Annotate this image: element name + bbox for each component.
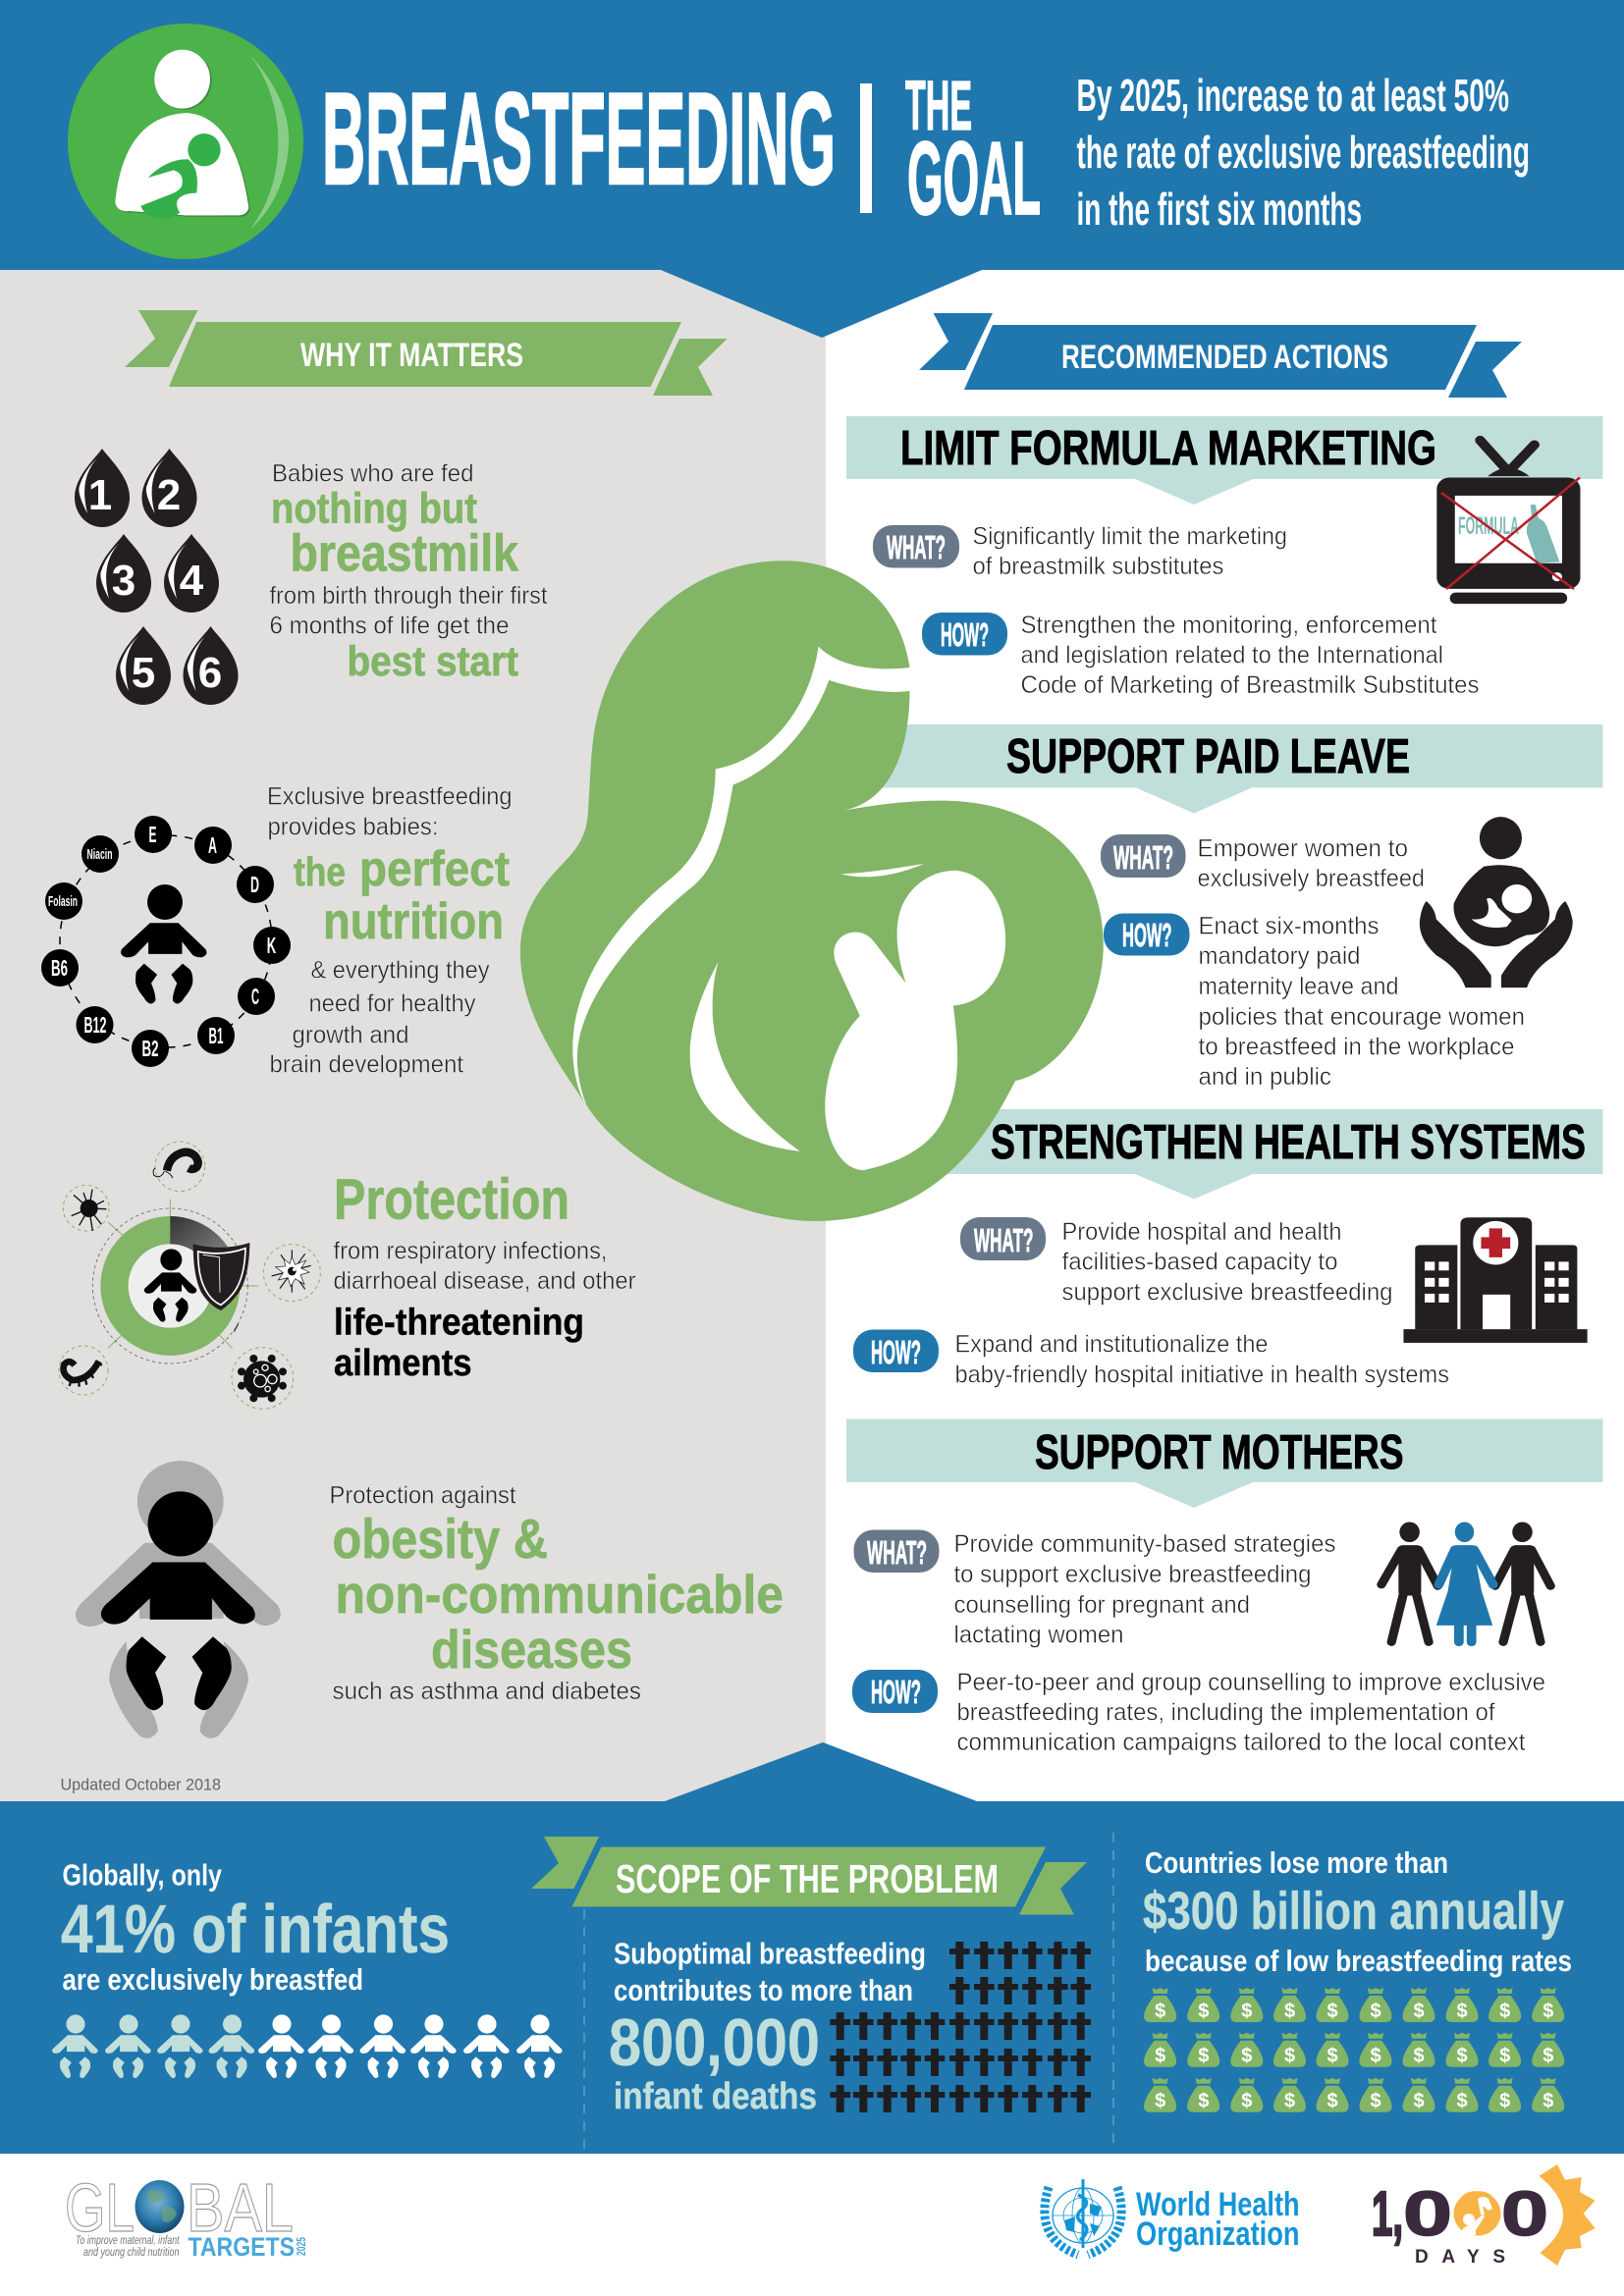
- stat: 800,000 infant deaths: contributes to more than: [614, 1973, 913, 2007]
- how text: mandatory paid: [1198, 942, 1361, 970]
- text block: protection: ailments: [334, 1343, 471, 1384]
- logo: 1,000 days: 0: [1403, 2178, 1452, 2249]
- how text: Code of Marketing of Breastmilk Substitutes: [1021, 671, 1479, 699]
- germ: caterpillar lower left: [64, 1362, 102, 1387]
- what text: Provide community-based strategies: [954, 1530, 1335, 1558]
- icon: baby with obesity silhouette: [76, 1461, 281, 1738]
- what text: Significantly limit the marketing: [972, 522, 1287, 550]
- icon: six milk drops: [75, 449, 238, 705]
- logo: world health organization: World Health: [1136, 2186, 1300, 2223]
- what pill: [960, 1217, 1046, 1260]
- text block: the perfect nutrition: [267, 783, 513, 1079]
- text block: nothing but breastmilk: Babies who are fed: [272, 460, 473, 488]
- icon: six milk drops: 5: [132, 649, 155, 697]
- heading: the goal: THE: [905, 68, 972, 145]
- panel: support paid leave: [846, 724, 1602, 1091]
- text block: protection: life-threatening: [334, 1302, 584, 1343]
- how text: [956, 1669, 1545, 1756]
- icon row: ten babies: [52, 2014, 563, 2078]
- logo: global targets 2025: and young child nutrition: [83, 2245, 180, 2259]
- text block: the perfect nutrition: perfect: [359, 841, 510, 896]
- logo: 1,000 days: 0: [1501, 2178, 1548, 2249]
- germ: star right: [272, 1250, 311, 1293]
- germ: worm top: [153, 1152, 198, 1178]
- mother and baby central illustration: [520, 561, 1104, 1221]
- how text: [1198, 913, 1525, 1091]
- panel: limit formula marketing: LIMIT FORMULA MARKETING: [900, 422, 1436, 475]
- icon: baby with vitamin ring: B12: [84, 1012, 106, 1038]
- what text: [954, 1530, 1335, 1649]
- stat: 41 percent of infants: 41% of infants: [61, 1891, 450, 1967]
- text block: the perfect nutrition: nutrition: [323, 893, 504, 950]
- logo: global targets 2025: TARGETS: [189, 2232, 295, 2262]
- what pill: [854, 1529, 939, 1573]
- text block: obesity and non-communicable diseases: such as asthma and diabetes: [332, 1678, 641, 1705]
- how pill: [852, 1670, 938, 1713]
- icon: three people holding hands: [1381, 1522, 1550, 1642]
- what text: lactating women: [954, 1622, 1123, 1649]
- goal statement: [1076, 70, 1530, 235]
- how pill: HOW?: [1122, 917, 1172, 953]
- what text: of breastmilk substitutes: [972, 553, 1223, 580]
- header band: [0, 0, 1624, 338]
- what pill: WHAT?: [1113, 839, 1173, 876]
- text block: nothing but breastmilk: [269, 460, 548, 685]
- icon: baby with vitamin ring: B1: [208, 1023, 224, 1048]
- text block: nothing but breastmilk: best start: [348, 638, 518, 685]
- icon: baby with vitamin ring: E: [149, 822, 157, 847]
- what text: Provide hospital and health: [1062, 1218, 1341, 1246]
- text block: nothing but breastmilk: from birth through their first: [269, 582, 548, 610]
- how pill: HOW?: [871, 1674, 921, 1710]
- ribbon: why it matters: WHY IT MATTERS: [300, 337, 523, 374]
- panel: support mothers: [846, 1419, 1602, 1756]
- ribbon: recommended actions: RECOMMENDED ACTIONS: [1061, 339, 1388, 376]
- logo: 1,000 days: [1372, 2164, 1596, 2268]
- left panel background: [0, 270, 826, 1801]
- how text: maternity leave and: [1198, 973, 1398, 1000]
- how text: policies that encourage women: [1198, 1003, 1525, 1031]
- icon: six milk drops: 1: [88, 471, 112, 519]
- text block: the perfect nutrition: Exclusive breastfeeding: [267, 783, 513, 811]
- how text: and in public: [1198, 1063, 1331, 1091]
- what text: [1062, 1218, 1392, 1306]
- icon: baby with vitamin ring: C: [251, 984, 259, 1009]
- text block: nothing but breastmilk: nothing but: [271, 485, 477, 532]
- text block: protection: diarrhoeal disease, and other: [334, 1267, 636, 1295]
- how pill: HOW?: [871, 1334, 921, 1370]
- ribbon: why it matters: [125, 310, 728, 396]
- what text: support exclusive breastfeeding: [1062, 1278, 1392, 1306]
- icon grid: money bags: $$$$$$$$$$: [1155, 2091, 1553, 2112]
- text: GOAL: [907, 121, 1041, 237]
- logo: global targets 2025: GL: [65, 2169, 135, 2246]
- icon: baby with vitamin ring: [41, 816, 291, 1067]
- icon: six milk drops: 3: [112, 557, 135, 605]
- panel: support paid leave: SUPPORT PAID LEAVE: [1006, 730, 1410, 783]
- title: [322, 67, 872, 213]
- text block: protection: [334, 1168, 636, 1384]
- how pill: HOW?: [941, 616, 989, 653]
- icon: television with crossed formula ad: FORMULA: [1458, 512, 1519, 540]
- logo: 1,000 days: DAYS: [1415, 2247, 1505, 2268]
- logo: 1,000 days: 0: [1453, 2178, 1500, 2249]
- icon: six milk drops: 2: [157, 471, 181, 519]
- text block: nothing but breastmilk: 6 months of life get the: [269, 613, 509, 640]
- text block: obesity and non-communicable diseases: Protection against: [330, 1482, 516, 1510]
- panel: limit formula marketing: [846, 416, 1602, 699]
- icon: baby with vitamin ring: Niacin: [86, 846, 112, 863]
- stat: 800,000 infant deaths: 800,000: [609, 2005, 820, 2080]
- how text: Peer-to-peer and group counselling to improve exclusive: [956, 1669, 1545, 1696]
- text block: the perfect nutrition: provides babies:: [267, 814, 438, 841]
- text block: obesity and non-communicable diseases: [330, 1482, 784, 1705]
- what pill: WHAT?: [974, 1222, 1033, 1258]
- how text: to breastfeed in the workplace: [1198, 1033, 1514, 1060]
- ribbon: recommended actions: [919, 313, 1522, 398]
- stat: 41 percent of infants: Globally, only: [63, 1857, 223, 1893]
- how text: breastfeeding rates, including the implementation of: [956, 1698, 1495, 1726]
- stat: 800,000 infant deaths: Suboptimal breastfeeding: [614, 1936, 926, 1971]
- panel: scope of the problem band: [0, 1742, 1624, 2154]
- how text: Expand and institutionalize the: [954, 1331, 1269, 1359]
- how text: [954, 1331, 1449, 1388]
- text block: obesity and non-communicable diseases: non-communicable: [336, 1564, 784, 1625]
- logo: 1,000 days: 1,: [1372, 2178, 1403, 2249]
- what pill: WHAT?: [887, 529, 946, 565]
- stat: 41 percent of infants: [61, 1857, 450, 1997]
- what pill: [1101, 834, 1186, 878]
- logo: global targets 2025: To improve maternal, infant: [76, 2233, 180, 2247]
- ribbon: scope of the problem: SCOPE OF THE PROBLEM: [616, 1856, 999, 1901]
- how pill: [1104, 913, 1190, 956]
- logo: global targets 2025: BAL: [187, 2169, 294, 2246]
- icon: television with crossed formula ad: [1436, 440, 1580, 604]
- what text: to support exclusive breastfeeding: [954, 1561, 1312, 1588]
- icon grid: crosses: [830, 1942, 1091, 2112]
- panel: support mothers: SUPPORT MOTHERS: [1035, 1426, 1404, 1479]
- panel: strengthen health systems: [846, 1109, 1602, 1388]
- how text: communication campaigns tailored to the local context: [956, 1729, 1526, 1756]
- icon: baby with vitamin ring: B6: [51, 955, 68, 981]
- icon: baby with vitamin ring: A: [208, 832, 217, 858]
- what text: exclusively breastfeed: [1198, 865, 1425, 892]
- ribbon: scope of the problem: [531, 1837, 1087, 1914]
- text block: the perfect nutrition: brain development: [269, 1051, 463, 1079]
- what text: [972, 522, 1287, 580]
- how pill: [922, 613, 1007, 656]
- stat: 800,000 infant deaths: infant deaths: [614, 2076, 817, 2117]
- text block: protection: Protection: [334, 1168, 569, 1231]
- icon: baby with vitamin ring: B2: [141, 1036, 159, 1061]
- stat: 41 percent of infants: are exclusively breastfed: [63, 1962, 363, 1997]
- icon grid: money bags: $$$$$$$$$$: [1155, 2001, 1553, 2022]
- how text: Enact six-months: [1198, 913, 1379, 940]
- text block: the perfect nutrition: the: [294, 849, 346, 894]
- what text: [1198, 834, 1425, 892]
- how text: Strengthen the monitoring, enforcement: [1021, 612, 1437, 639]
- germ: spiked cell left: [72, 1190, 106, 1231]
- what text: facilities-based capacity to: [1062, 1249, 1337, 1276]
- icon: protected baby with germs: [59, 1142, 320, 1409]
- goal statement: in the first six months: [1076, 184, 1362, 235]
- text block: nothing but breastmilk: breastmilk: [291, 524, 518, 583]
- what text: counselling for pregnant and: [954, 1591, 1250, 1619]
- icon: hospital: [1403, 1217, 1588, 1343]
- icon grid: money bags: [1144, 1988, 1564, 2112]
- heading: the goal: [905, 68, 1041, 237]
- update note: Updated October 2018: [61, 1775, 221, 1794]
- text block: the perfect nutrition: & everything they: [310, 957, 490, 985]
- logo: global targets 2025: 2025: [294, 2237, 308, 2256]
- text block: obesity and non-communicable diseases: diseases: [431, 1619, 632, 1680]
- what text: Empower women to: [1198, 834, 1408, 862]
- stat: 300 billion annually: [1143, 1845, 1572, 1978]
- text block: obesity and non-communicable diseases: obesity &: [332, 1508, 548, 1571]
- text: BREASTFEEDING: [322, 67, 836, 212]
- icon grid: money bags: $$$$$$$$$$: [1155, 2046, 1553, 2067]
- text block: the perfect nutrition: need for healthy: [308, 990, 476, 1018]
- icon: six milk drops: 4: [180, 557, 204, 605]
- icon: baby with vitamin ring: D: [250, 872, 259, 897]
- text block: the perfect nutrition: growth and: [293, 1022, 408, 1049]
- stat: 300 billion annually: Countries lose more than: [1145, 1845, 1448, 1880]
- logo: world health organization: [1045, 2179, 1300, 2255]
- what pill: [873, 525, 959, 567]
- icon: baby with vitamin ring: K: [267, 933, 276, 958]
- logo: world health organization: Organization: [1136, 2216, 1300, 2253]
- icon: six milk drops: 6: [198, 649, 222, 697]
- how text: baby-friendly hospital initiative in health systems: [954, 1361, 1449, 1388]
- stat: 800,000 infant deaths: [609, 1936, 926, 2117]
- germ: virus lower right: [238, 1355, 287, 1402]
- what pill: WHAT?: [867, 1534, 927, 1571]
- logo: global targets 2025: [65, 2169, 308, 2262]
- how text: [1021, 612, 1479, 699]
- icon: hands holding mother and baby: [1420, 817, 1573, 988]
- icon: baby with vitamin ring: Folasin: [48, 893, 78, 910]
- icon: breastfeeding logo circle: [68, 24, 303, 259]
- how pill: [853, 1329, 939, 1372]
- how text: and legislation related to the International: [1021, 642, 1443, 669]
- text block: protection: from respiratory infections,: [334, 1238, 607, 1265]
